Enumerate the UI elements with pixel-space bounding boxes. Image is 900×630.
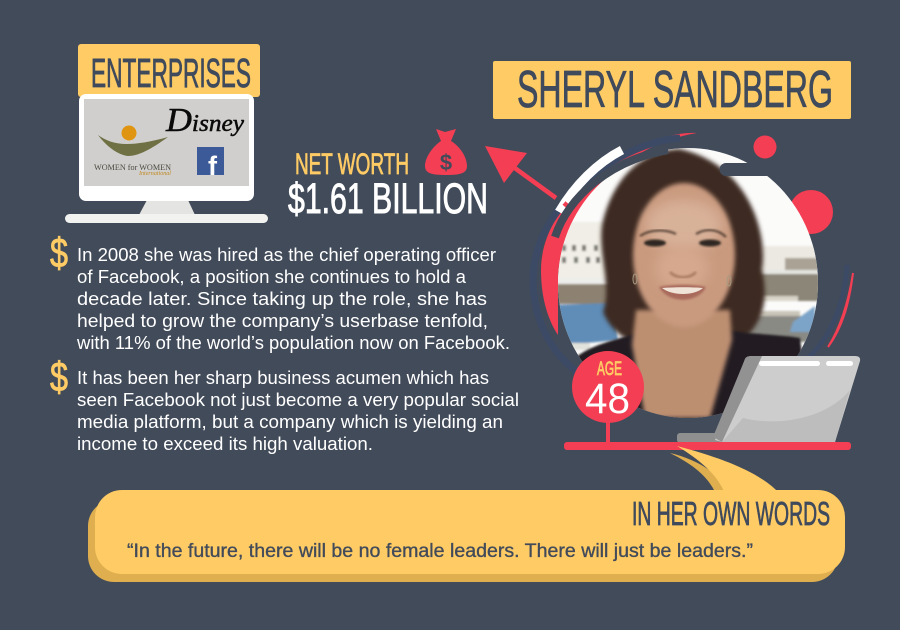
- text block: first paragraph: helped to grow the company’s userbase tenfold,: [77, 311, 488, 331]
- logo: women for women international: International: [138, 171, 171, 177]
- background buildings: [555, 222, 822, 350]
- decoration: arrow tail tip: [564, 203, 571, 209]
- logo: facebook: f: [208, 151, 218, 181]
- text block: second paragraph: income to exceed its high valuation.: [77, 434, 373, 454]
- decoration: right red crescent: [828, 273, 853, 347]
- mouth: [659, 285, 706, 300]
- decoration: outer navy ring arc: [533, 138, 680, 372]
- badge: age: [572, 351, 644, 423]
- eyes: [644, 240, 666, 246]
- icon: laptop: [677, 356, 860, 443]
- eyebrows: [640, 230, 676, 236]
- decoration: inner navy arc over portrait: [555, 150, 668, 237]
- text block: second paragraph: [77, 368, 519, 454]
- logo: women for women international: [94, 126, 171, 177]
- quote text: “In the future, there will be no female leaders. There will just be leaders.”: [127, 541, 753, 562]
- icon: money bag: [425, 129, 467, 175]
- decoration: navy bar across portrait top: [720, 163, 790, 176]
- decoration: large red circle behind portrait: [789, 190, 833, 234]
- icon: computer monitor with enterprise logos: [65, 94, 268, 223]
- decoration: red crescent: [541, 133, 697, 335]
- icon: dollar bullet two: $: [50, 353, 68, 400]
- earrings: [633, 274, 637, 284]
- icon: age stand and baseline: [564, 420, 851, 450]
- logo: facebook: [197, 147, 224, 181]
- text block: first paragraph: [76, 245, 510, 353]
- hair: [601, 149, 765, 345]
- heading: enterprises tag: ENTERPRISES: [91, 50, 251, 96]
- arrow: pointing to net worth: [485, 146, 556, 198]
- text block: first paragraph: decade later. Since taking up the role, she has: [77, 289, 487, 309]
- blazer: [575, 330, 810, 420]
- text block: first paragraph: In 2008 she was hired as the chief operating officer: [77, 245, 496, 265]
- decoration: right navy arc: [808, 265, 847, 358]
- neck and chest: [632, 310, 732, 418]
- photo: portrait of Sheryl Sandberg: [558, 148, 818, 418]
- badge: age: 48: [585, 375, 630, 423]
- logo: disney: Disney: [165, 102, 244, 139]
- text block: second paragraph: media platform, but a company which is yielding an: [77, 412, 503, 432]
- face: [633, 183, 735, 327]
- label: net worth: NET WORTH: [295, 148, 409, 181]
- nose: [670, 272, 696, 277]
- stat: net worth value: $1.61 BILLION: [288, 175, 488, 223]
- heading: enterprises tag: [78, 44, 260, 97]
- icon: dollar bullet one: $: [50, 229, 68, 276]
- badge: age: AGE: [597, 359, 622, 380]
- icon: money bag: $: [440, 150, 452, 175]
- text block: second paragraph: seen Facebook not just become a very popular social: [77, 390, 519, 410]
- callout: quote speech bubble: [88, 446, 845, 582]
- text block: second paragraph: It has been her sharp business acumen which has: [77, 368, 489, 388]
- decoration: small red circle: [754, 136, 776, 158]
- text block: first paragraph: with 11% of the world’s population now on Facebook.: [76, 333, 510, 353]
- logo: women for women international: WOMEN for WOMEN: [94, 163, 171, 172]
- decoration: white sliver behind portrait: [559, 150, 622, 212]
- text block: first paragraph: of Facebook, a position she continues to hold a: [77, 267, 467, 287]
